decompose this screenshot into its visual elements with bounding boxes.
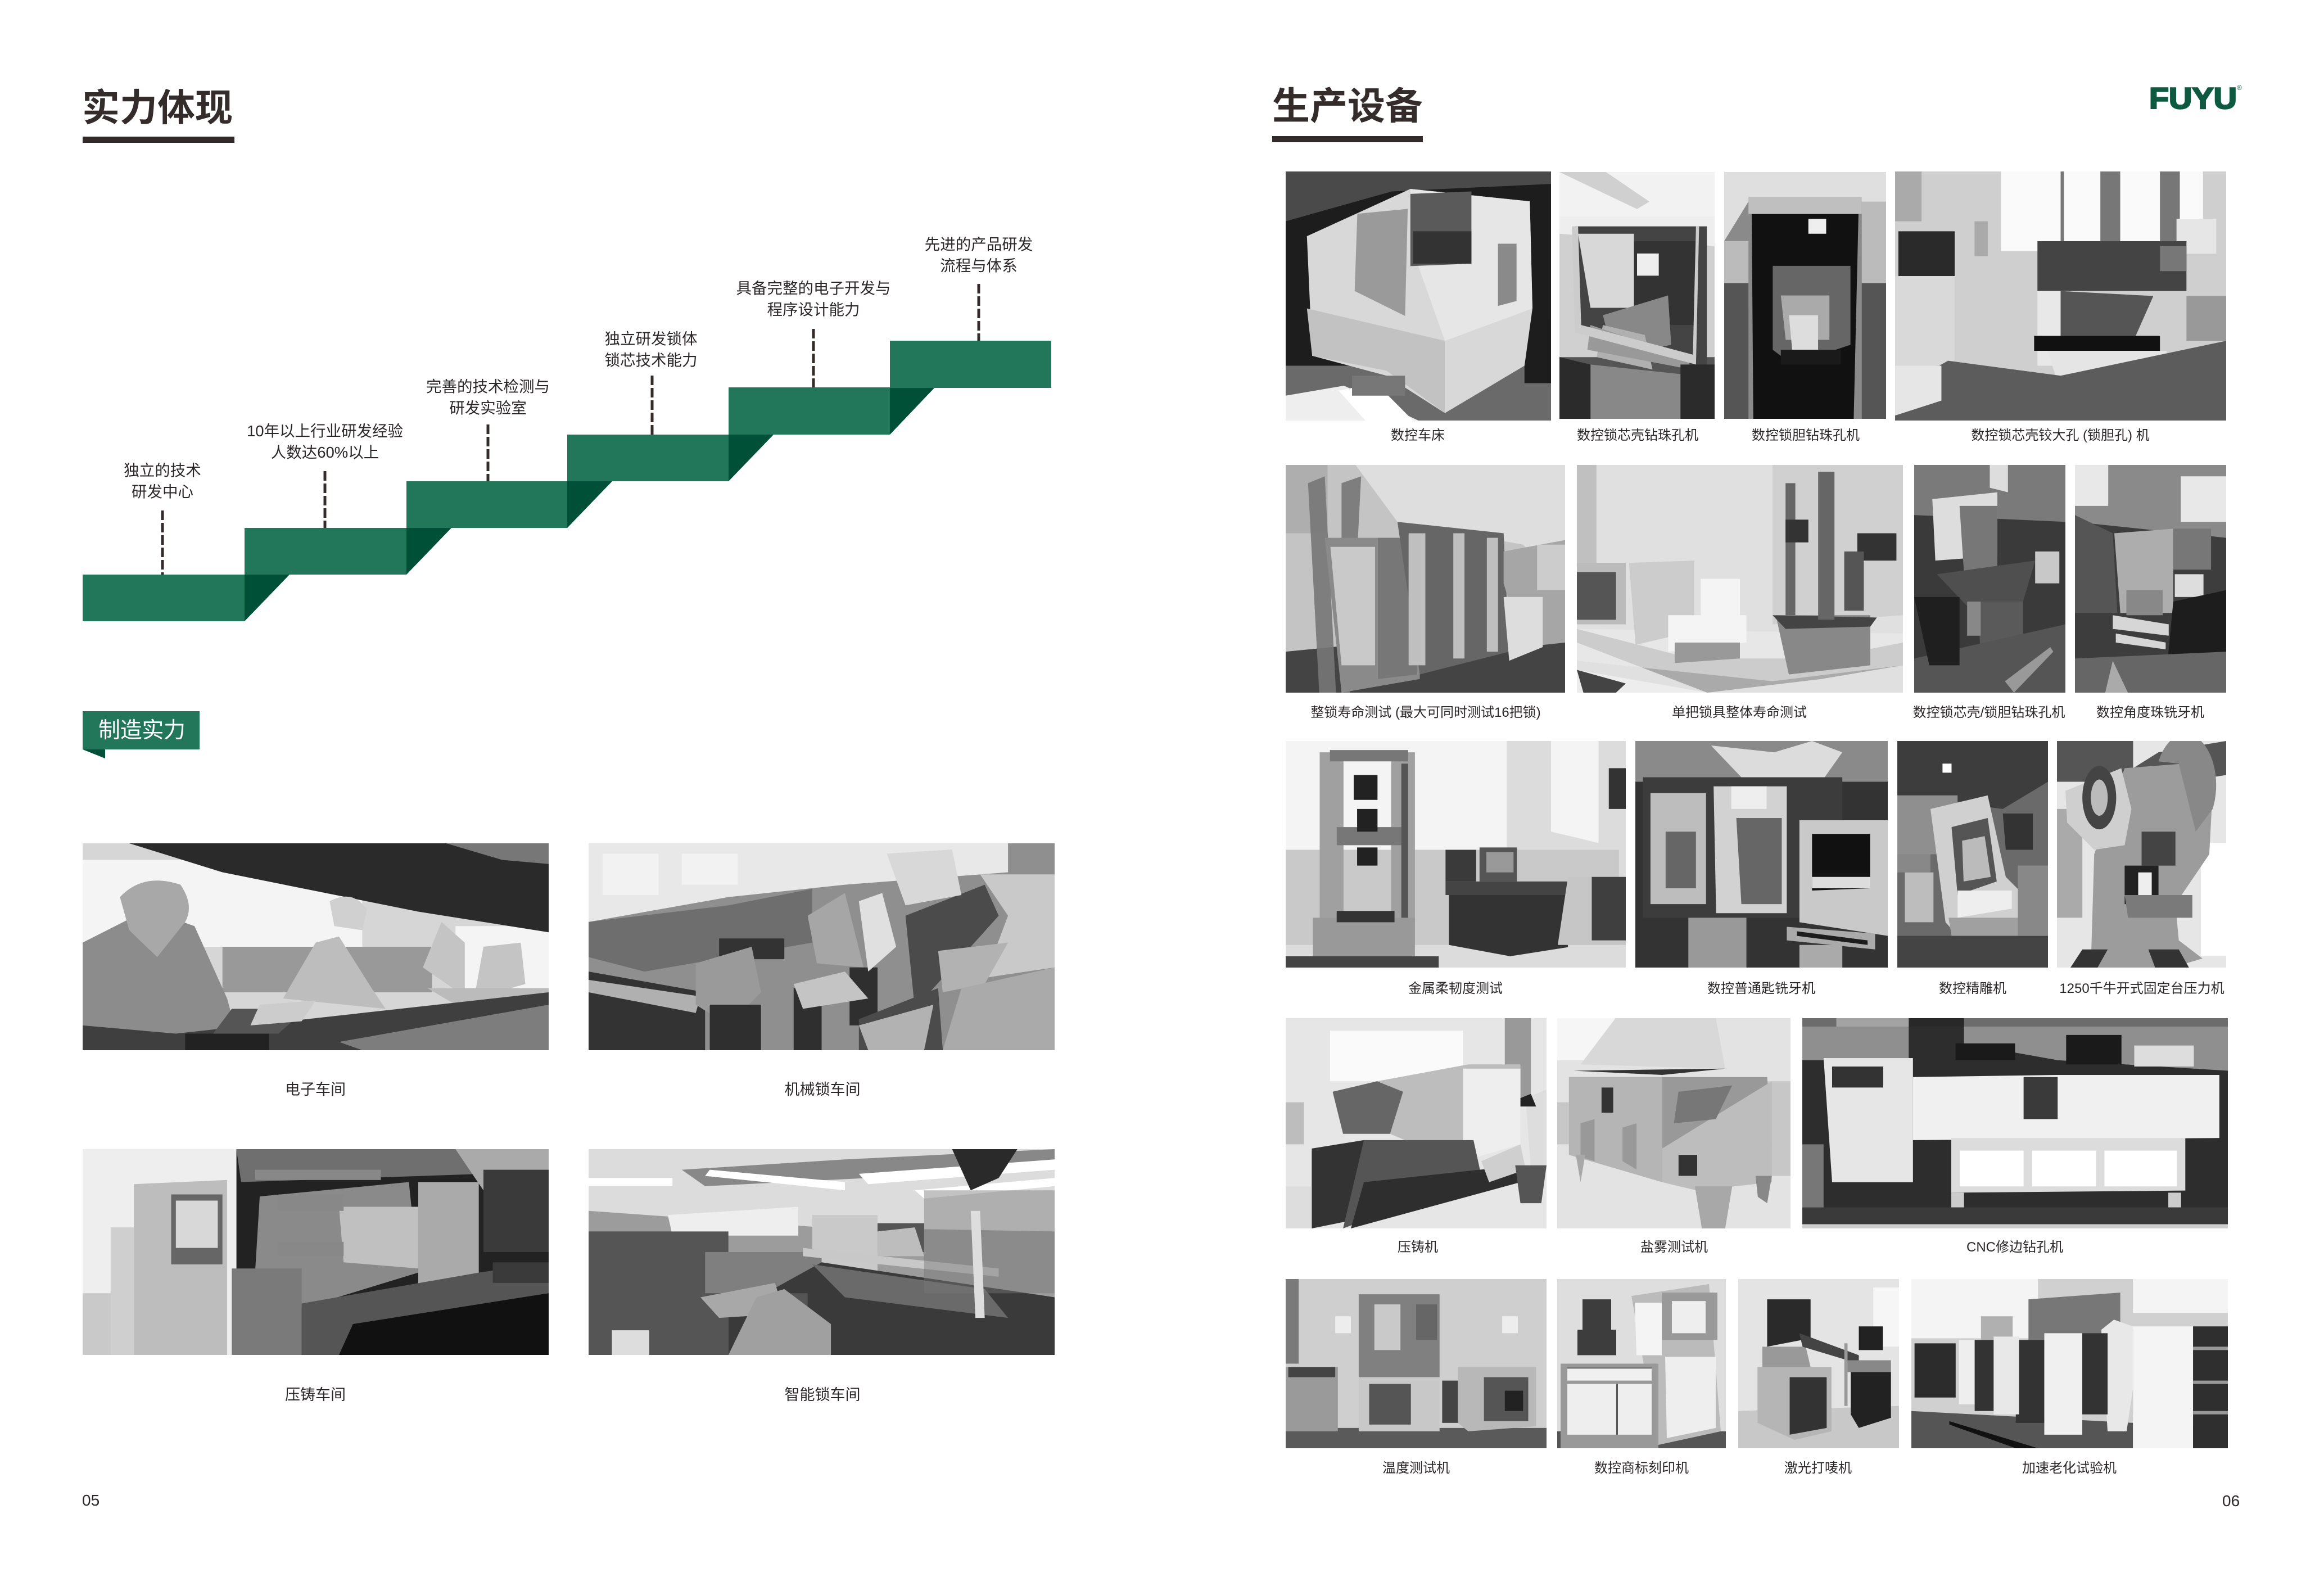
step 2: R&D experience: 10年以上行业研发经验 [247, 422, 403, 440]
caption: 数控商标刻印机: 数控商标刻印机 [1594, 1461, 1689, 1476]
caption: 压铸车间: 压铸车间 [285, 1386, 346, 1403]
caption: 数控车床: 数控车床 [1391, 428, 1445, 443]
step 4: lock body and cylinder [567, 330, 774, 481]
left page heading: 实力体现: 实力体现 [82, 87, 233, 129]
caption: 温度测试机: 温度测试机 [1382, 1461, 1450, 1476]
step 6: product development process: 先进的产品研发 [925, 236, 1033, 253]
step 3: testing laboratory: 研发实验室 [449, 399, 527, 417]
photo: CNC engraving machine [1897, 741, 2048, 968]
photo: accelerated aging test machine [1911, 1279, 2228, 1448]
step 5: electronics and programming [729, 279, 935, 435]
photo: 1250 kN press [2057, 741, 2226, 968]
photo: lock core reaming machine [1895, 171, 2226, 421]
step 6: product development process [890, 236, 1051, 388]
step 1: independent R&D center: 研发中心 [132, 483, 193, 500]
caption: 智能锁车间: 智能锁车间 [785, 1386, 860, 1403]
photo: mechanical lock workshop [589, 843, 1055, 1050]
caption: 数控普通匙铣牙机: 数控普通匙铣牙机 [1707, 981, 1815, 996]
photo: trademark marking machine [1557, 1279, 1726, 1448]
photo: die casting workshop [83, 1149, 549, 1355]
step 3: testing laboratory: 完善的技术检测与 [426, 378, 550, 395]
photo: laser marking machine [1738, 1279, 1899, 1448]
caption: 压铸机: 压铸机 [1398, 1240, 1438, 1255]
page number 05: 05 [82, 1492, 100, 1509]
photo: CNC trimming and drilling machine [1802, 1018, 2228, 1228]
photo: angle ball milling machine [2075, 465, 2226, 693]
caption: 数控锁芯壳钻珠孔机: 数控锁芯壳钻珠孔机 [1577, 428, 1698, 443]
caption: 机械锁车间: 机械锁车间 [785, 1081, 860, 1098]
photo: die casting machine [1286, 1018, 1547, 1228]
caption: 数控精雕机: 数控精雕机 [1939, 981, 2006, 996]
section tag: 制造实力: 制造实力 [98, 719, 186, 743]
section tag: 制造实力 [83, 711, 200, 758]
photo: lock cylinder drilling machine [1724, 172, 1886, 419]
logo: FUYU: ® [2237, 84, 2242, 92]
caption: 数控锁芯壳铰大孔(锁胆孔)机: 数控锁芯壳铰大孔 (锁胆孔) 机 [1971, 428, 2150, 443]
right page heading: 生产设备: 生产设备 [1272, 85, 1423, 128]
photo: lock core shell drilling machine [1559, 172, 1715, 419]
photo: whole lock life test [1286, 465, 1565, 693]
caption: 单把锁具整体寿命测试: 单把锁具整体寿命测试 [1672, 705, 1807, 720]
photo: CNC lathe [1286, 171, 1551, 421]
caption: 金属柔韧度测试: 金属柔韧度测试 [1408, 981, 1503, 996]
step 1: independent R&D center [83, 462, 290, 621]
caption: 电子车间: 电子车间 [285, 1081, 346, 1098]
step 5: electronics and programming: 程序设计能力 [767, 301, 860, 318]
step 4: lock body and cylinder: 锁芯技术能力 [605, 351, 697, 369]
caption: 数控锁芯壳/锁胆钻珠孔机: 数控锁芯壳/锁胆钻珠孔机 [1913, 705, 2065, 720]
caption: 整锁寿命测试: 整锁寿命测试 (最大可同时测试16把锁) [1310, 705, 1541, 720]
caption: CNC修边钻孔机: CNC修边钻孔机 [1966, 1240, 2063, 1255]
page number 06: 06 [2222, 1492, 2240, 1510]
photo: metal toughness test [1286, 741, 1626, 968]
caption: 激光打唛机: 激光打唛机 [1784, 1461, 1852, 1476]
photo: smart lock workshop [589, 1149, 1055, 1355]
step 4: lock body and cylinder: 独立研发锁体 [605, 330, 697, 347]
step 6: product development process: 流程与体系 [940, 257, 1018, 274]
step 2: R&D experience [245, 422, 451, 575]
step 1: independent R&D center: 独立的技术 [124, 462, 201, 479]
photo: ball hole drilling machine [1914, 465, 2065, 693]
caption: 1250千牛开式固定台压力机: 1250千牛开式固定台压力机 [2059, 981, 2224, 996]
step 3: testing laboratory [406, 378, 612, 528]
step 2: R&D experience: 人数达60%以上 [271, 444, 379, 461]
caption: 数控锁胆钻珠孔机: 数控锁胆钻珠孔机 [1752, 428, 1860, 443]
step 5: electronics and programming: 具备完整的电子开发与 [736, 279, 890, 297]
logo: FUYU: FUYU [2149, 82, 2237, 115]
caption: 盐雾测试机: 盐雾测试机 [1640, 1240, 1708, 1255]
caption: 加速老化试验机: 加速老化试验机 [2022, 1461, 2117, 1476]
photo: electronics workshop [83, 843, 549, 1050]
photo: key milling machine [1635, 741, 1888, 968]
photo: temperature test machine [1286, 1279, 1547, 1448]
caption: 数控角度珠铣牙机: 数控角度珠铣牙机 [2096, 705, 2204, 720]
staircase chart: strengths [83, 236, 1051, 621]
photo: salt spray test machine [1557, 1018, 1791, 1228]
photo: single lock life test [1577, 465, 1903, 693]
